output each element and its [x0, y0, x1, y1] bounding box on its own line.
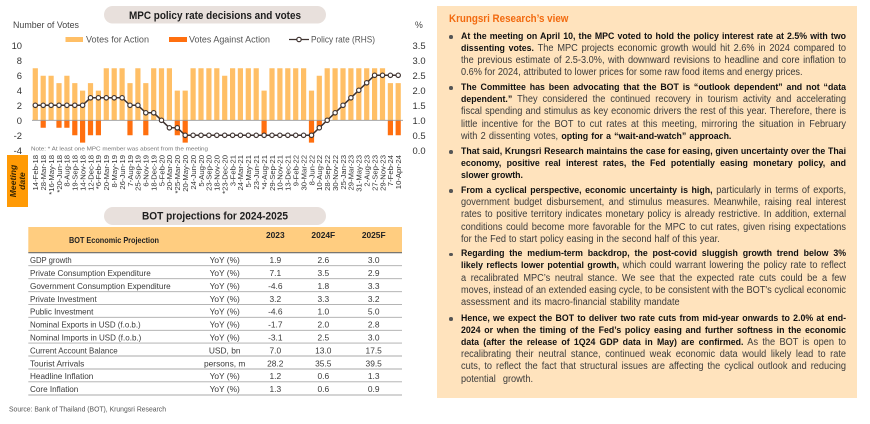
bars: votes against action: [41, 120, 401, 143]
meeting date axis labels: 29-Sep-21: [268, 155, 277, 191]
meeting date axis labels: *16-May-18: [47, 155, 56, 195]
table header: BOT Economic Projection: [69, 235, 159, 245]
meeting date axis labels: 8-Aug-18: [63, 155, 72, 187]
right axis labels: [412, 40, 426, 156]
table rows: 17.5: [366, 345, 382, 355]
table rows: YoY (%): [210, 384, 240, 394]
bars: votes for action: [33, 68, 401, 120]
meeting date axis labels: 25-Sep-19: [134, 155, 143, 191]
paragraph 1: [461, 31, 846, 78]
table rows: 28.2: [267, 358, 284, 368]
table rows: YoY (%): [210, 255, 240, 265]
table rows: 3.5: [317, 268, 329, 278]
meeting date axis labels: 26-Jun-19: [118, 155, 127, 190]
meeting date axis labels: 7-Feb-24: [386, 154, 395, 186]
projection table: [28, 227, 402, 395]
meeting date axis labels: 2-Aug-23: [362, 155, 372, 187]
meeting date axis labels: 24-Mar-21: [236, 155, 245, 190]
table rows: 1.9: [269, 255, 281, 265]
panel: Krungsri Research's view: [437, 6, 857, 398]
paragraph 3: [461, 146, 846, 181]
table header: 2025F: [362, 230, 386, 240]
meeting date axis labels: 18-Dec-19: [150, 155, 158, 191]
bullet 1: [449, 35, 453, 39]
table rows: YoY (%): [210, 268, 240, 278]
meeting date label: date: [17, 172, 27, 190]
meeting date axis labels: 24-Jun-20: [189, 155, 198, 190]
table header: [28, 227, 402, 252]
table rows: Nominal Exports in USD (f.o.b.): [30, 320, 141, 330]
table rows: 39.5: [366, 358, 382, 368]
table rows: Headline Inflation: [30, 371, 94, 381]
bullet 4: [449, 189, 453, 193]
paragraph 2: fiscal spending and stimulus as key economic drivers the rest of this year. Therefore, there is: [461, 106, 846, 117]
meeting date axis labels: 20-May-20: [181, 155, 190, 192]
meeting date axis labels: 10-Aug-22: [315, 155, 324, 191]
table rows: 0.6: [317, 384, 329, 394]
meeting date axis labels: 25-Jan-23: [339, 155, 348, 190]
table rows: 0.9: [368, 384, 380, 394]
table rows: YoY (%): [210, 320, 240, 330]
legend: Votes Against Action: [189, 34, 270, 44]
chart note: Note: * At least one MPC member was absent from the meeting: [31, 146, 208, 152]
meeting date axis labels: 5-May-21: [244, 155, 253, 187]
paragraph 6: Hence, we expect the BOT to deliver two rate cuts from mid-year onwards to 2.0% at end-: [461, 313, 846, 324]
paragraph 1: At the meeting on April 10, the MPC voted to hold the policy interest rate at 2.5% with two: [461, 31, 846, 42]
meeting date axis labels: 31-May-23: [355, 155, 364, 192]
table rows: 5.0: [368, 307, 380, 317]
table rows: Private Investment: [30, 294, 97, 304]
table rows: 7.1: [269, 268, 281, 278]
table rows: 2.9: [368, 268, 380, 278]
right axis labels: 2.0: [412, 85, 426, 96]
legend: [66, 34, 375, 44]
table rows: 1.8: [317, 281, 329, 291]
table title pill: BOT projections for 2024-2025: [142, 210, 288, 222]
chart title pill: MPC policy rate decisions and votes: [129, 10, 301, 22]
meeting date axis labels: 30-Mar-22: [299, 155, 308, 190]
paragraph 2: The Committee has been advocating that the BOT is “outlook dependent” and not “data: [461, 82, 846, 93]
left axis labels: -2: [14, 130, 22, 141]
paragraph 5: [461, 248, 846, 308]
left axis labels: 4: [17, 85, 22, 96]
table rows: YoY (%): [210, 294, 240, 304]
paragraph 4: [461, 185, 846, 245]
meeting date axis labels: 19-Sep-18: [71, 155, 80, 191]
table rows: YoY (%): [210, 281, 240, 291]
table rows: -1.7: [268, 320, 283, 330]
table rows: YoY (%): [210, 332, 240, 342]
table rows: Public Investment: [30, 307, 94, 317]
table rows: 3.2: [269, 294, 281, 304]
right axis labels: 0.5: [412, 130, 426, 141]
paragraph 3: That said, Krungsri Research maintains the case for easing, given uncertainty over the Thai: [461, 146, 846, 157]
paragraph 5: a recalibrated MPC’s neutral stance. We see that the expected rate cuts could be a few: [461, 273, 846, 284]
meeting date axis labels: 20-Mar-20: [165, 155, 174, 190]
legend: Votes for Action: [86, 34, 149, 44]
paragraph 2: with 2 dissenting votes, opting for a “wait-and-watch” approach.: [461, 131, 732, 142]
meeting date axis labels: 9-Feb-22: [292, 155, 300, 186]
left axis labels: 8: [17, 55, 22, 66]
paragraph 4: rates to positive territory indicates monetary policy is already restrictive. In addition, external: [461, 209, 846, 220]
table rows: GDP growth: [30, 255, 72, 265]
table rows: -4.6: [268, 281, 283, 291]
policy rate line: [33, 73, 400, 138]
table rows: Tourist Arrivals: [30, 358, 84, 368]
left axis labels: 0: [17, 115, 22, 126]
paragraph 1: the previous estimate of 2.5-3.0%, with downward revisions to headline and core inflation to: [461, 55, 846, 66]
table rows: -4.6: [268, 307, 283, 317]
table rows: 1.0: [317, 307, 329, 317]
paragraph 6: data (after the release of 1Q24 GDP data in May) are confirmed. As the BOT is open to: [461, 337, 846, 348]
paragraph 6: [461, 313, 846, 385]
meeting date axis labels: *6-Feb-19: [94, 155, 103, 189]
paragraph 4: for the Fed to start policy easing in the second half of this year.: [461, 234, 720, 245]
meeting date axis labels: 8-Jun-22: [307, 155, 316, 185]
paragraph 6: cuts, to reflect the fact that structural issues are affecting the cyclical outlook and reducing: [461, 361, 846, 372]
chart title pill: [104, 6, 326, 24]
meeting date axis labels: *4-Aug-21: [260, 155, 269, 190]
table rows: Government Consumption Expenditure: [30, 281, 171, 291]
table rows: -3.1: [268, 332, 283, 342]
panel heading: Krungsri Research’s view: [449, 13, 568, 25]
left axis labels: 10: [12, 40, 22, 51]
left axis labels: -4: [14, 145, 22, 156]
legend: Policy rate (RHS): [311, 34, 375, 44]
meeting date axis labels: 20-Mar-19: [102, 155, 111, 190]
table rows: 13.0: [315, 345, 332, 355]
table rows: 2.5: [317, 332, 329, 342]
table rows: 35.5: [315, 358, 332, 368]
meeting date axis labels: *23-Dec-20: [220, 155, 230, 194]
table header: 2023: [266, 230, 285, 240]
table header: 2024F: [311, 230, 335, 240]
table rows: 3.3: [317, 294, 329, 304]
meeting date axis labels: 5-Feb-20: [157, 155, 166, 186]
meeting date axis labels: 13-Dec-21: [284, 155, 293, 191]
right axis title: %: [415, 20, 423, 30]
table rows: 1.3: [269, 384, 281, 394]
paragraph 4: conditions could become more favorable for the MPC to cut rates, given rising expectations: [461, 222, 846, 233]
meeting date axis labels: 28-Sep-22: [323, 155, 332, 191]
source note: Source: Bank of Thailand (BOT), Krungsri Research: [9, 404, 166, 414]
table rows: 1.3: [368, 371, 380, 381]
meeting date axis labels: 10-Nov-21: [276, 155, 285, 191]
meeting date axis labels: 10-Apr-24: [394, 154, 403, 189]
paragraph 1: dissenting votes. The MPC projects economic growth would hit 2.6% in 2024 compared to: [461, 43, 846, 54]
paragraph 4: government budget disbursement, and stimulus measures. Meanwhile, raising real interest: [461, 197, 846, 208]
table rows: 3.0: [368, 255, 380, 265]
bullet 5: [449, 253, 453, 256]
paragraph 4: From a cyclical perspective, economic uncertainty is high, particularly in terms of exports,: [461, 185, 846, 196]
paragraph 5: moves, instead of an extended easing cycle, to be consistent with the BOT's cyclical economic: [461, 285, 846, 296]
meeting date axis labels: 8-May-19: [110, 155, 119, 187]
left axis labels: 2: [17, 100, 22, 111]
meeting date axis labels: 3-Feb-21: [228, 155, 237, 186]
bullet 6: [449, 317, 453, 321]
table title pill: [104, 207, 326, 225]
meeting date axis labels: 18-Nov-20: [213, 155, 222, 191]
meeting date axis labels: *20-Jun-18: [55, 155, 64, 193]
meeting date axis labels: 7-Aug-19: [126, 155, 135, 187]
meeting date axis labels: 5-Aug-20: [197, 155, 206, 187]
paragraph 3: economy, positive real interest rates, the Fed potentially easing monetary policy, and: [461, 158, 846, 169]
table rows: 3.3: [368, 281, 380, 291]
table rows: USD, bn: [209, 345, 241, 355]
meeting date axis labels: 27-Sep-23: [370, 155, 379, 191]
table rows: YoY (%): [210, 371, 240, 381]
table rows: 2.6: [317, 255, 329, 265]
table rows: persons, m: [204, 358, 245, 368]
meeting date axis labels: 23-Sep-20: [205, 155, 214, 191]
meeting date axis labels: 12-Dec-18: [86, 155, 95, 191]
meeting date axis labels: 30-Nov-22: [331, 155, 340, 191]
table rows: 7.0: [269, 345, 281, 355]
table rows: Private Consumption Expenditure: [30, 268, 151, 278]
meeting date axis labels: 23-Jun-21: [252, 155, 261, 190]
meeting date axis labels: 14-Nov-18: [78, 155, 87, 191]
right axis labels: 3.0: [412, 55, 426, 66]
right axis labels: 1.0: [412, 115, 426, 126]
left axis labels: 6: [17, 70, 22, 81]
table rows: Current Account Balance: [30, 345, 118, 355]
table rows: 2.0: [317, 320, 329, 330]
paragraph 2: little incentive for the BOT to cut rates at this meeting, mirroring the situation in February: [461, 119, 846, 130]
paragraph 2: [461, 82, 846, 142]
meeting date label: [7, 155, 28, 207]
left axis labels: [12, 40, 22, 156]
table rows: 2.8: [368, 320, 380, 330]
table rows: 3.2: [368, 294, 380, 304]
meeting date axis labels: [31, 154, 403, 195]
right axis labels: 2.5: [412, 70, 426, 81]
right axis labels: 0.0: [412, 145, 426, 156]
meeting date axis labels: 6-Nov-19: [142, 155, 151, 187]
meeting date axis labels: 28-Mar-18: [39, 155, 48, 190]
paragraph 6: recalibrating their neutral stance, continued weak economic data would likely lead to rate: [461, 349, 846, 360]
table rows: 0.6: [317, 371, 329, 381]
meeting date axis labels: *25-Mar-20: [173, 155, 182, 193]
right axis labels: 3.5: [412, 40, 426, 51]
bullet 2: [449, 86, 453, 90]
table rows: YoY (%): [210, 307, 240, 317]
meeting date axis labels: 29-Mar-23: [347, 155, 356, 190]
bullet 3: [449, 150, 453, 154]
meeting date label: Meeting: [8, 164, 18, 197]
table rows: [30, 255, 382, 394]
meeting date axis labels: 14-Feb-18: [31, 155, 40, 190]
paragraph 5: assessment and its macro-financial stability mandate: [461, 297, 680, 308]
table rows: 3.0: [368, 332, 380, 342]
paragraph 3: slower growth.: [461, 170, 523, 181]
paragraph 2: dependent.” They considered the continued recovery in tourism activity and accelerating: [461, 94, 846, 105]
paragraph 6: 2024 or when the timing of the Fed’s policy easing and further softness in the economic: [461, 325, 846, 336]
right axis labels: 1.5: [412, 100, 426, 111]
table rows: 1.2: [269, 371, 281, 381]
table rows: Nominal Imports in USD (f.o.b.): [30, 332, 141, 342]
paragraph 6: potential growth.: [461, 374, 533, 385]
table rows: Core Inflation: [30, 384, 79, 394]
left axis title: Number of Votes: [13, 20, 80, 30]
paragraph 1: 0.6% for 2024, attributed to lower prices for some raw food items and energy prices.: [461, 67, 803, 78]
paragraph 5: Regarding the medium-term backdrop, the post-covid sluggish growth trend below 3%: [461, 248, 846, 259]
chart and table column: [7, 6, 426, 414]
paragraph 5: likely reflects lower potential growth, which could warrant lowering the policy rate to reflect: [461, 260, 846, 271]
meeting date axis labels: 29-Nov-23: [378, 155, 387, 191]
